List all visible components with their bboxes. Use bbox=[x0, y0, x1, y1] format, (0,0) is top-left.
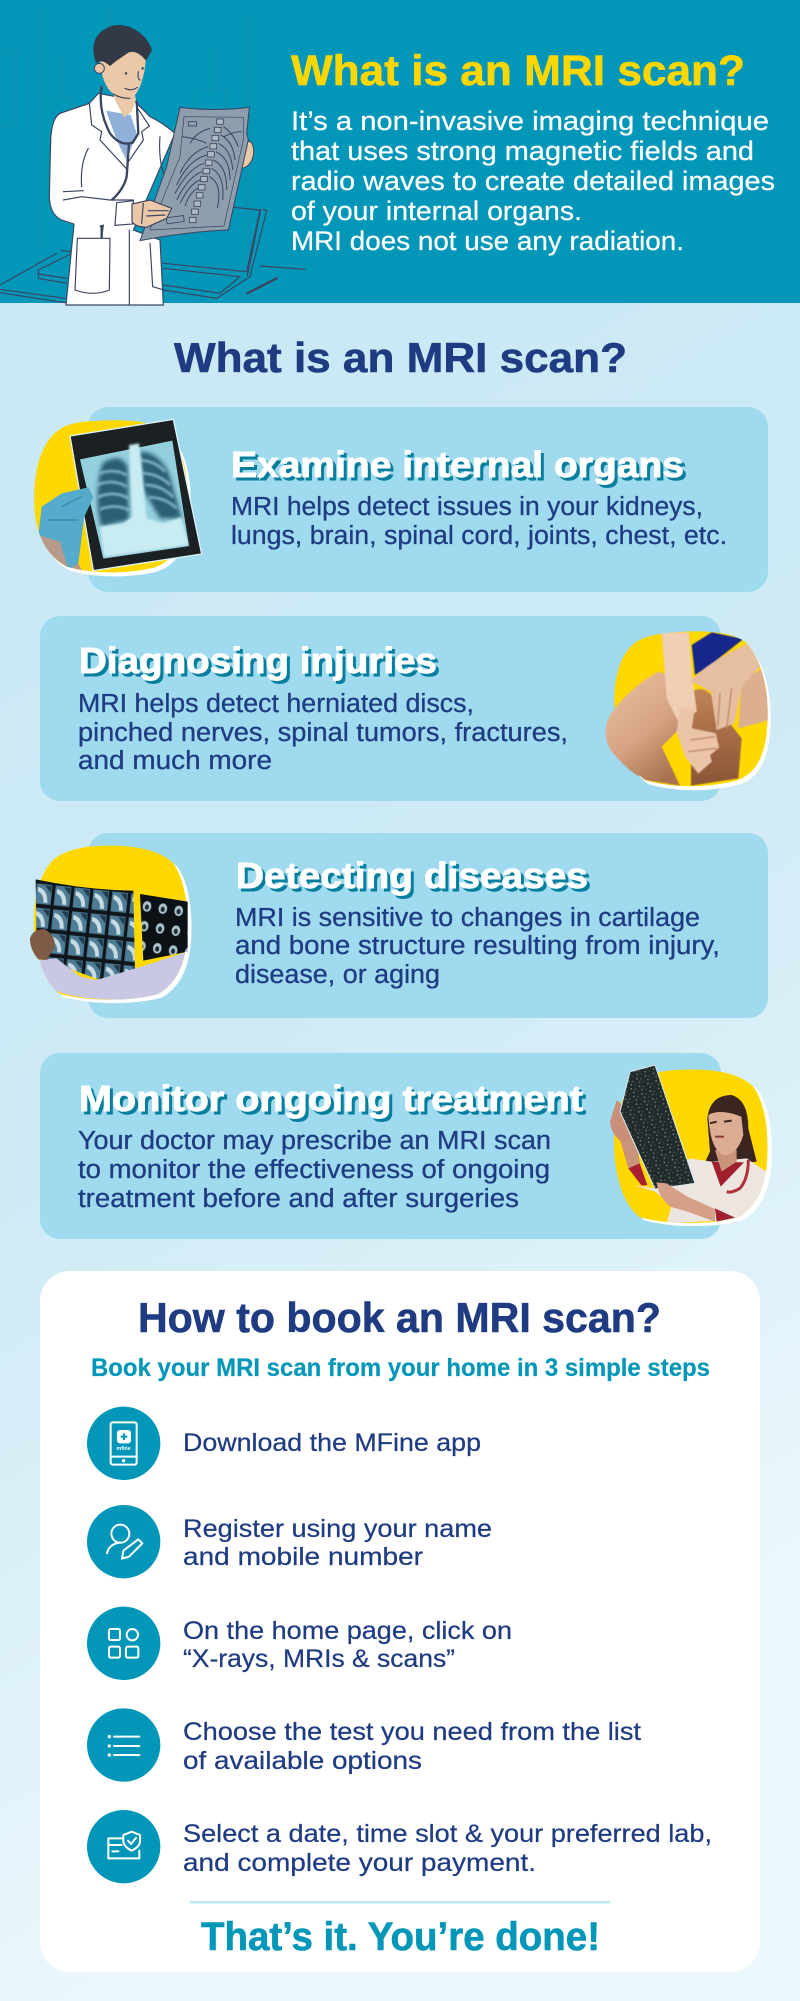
step text: “X-rays, MRIs & scans” bbox=[183, 1645, 455, 1673]
step 2 bbox=[87, 1505, 492, 1578]
photo: hands holding knee bbox=[605, 631, 771, 790]
neck and face bbox=[715, 1150, 737, 1172]
step text: Download the MFine app bbox=[183, 1429, 481, 1457]
closing message: That’s it. You’re done! bbox=[201, 1915, 600, 1959]
desk, tablet and laptop bbox=[0, 207, 305, 303]
step text: and mobile number bbox=[183, 1543, 423, 1571]
panel: top banner bbox=[0, 0, 800, 305]
coat cuff bbox=[115, 201, 133, 225]
doctor's coat bbox=[49, 93, 175, 305]
card title: Monitor ongoing treatment bbox=[79, 1078, 583, 1119]
step text: Choose the test you need from the list bbox=[183, 1718, 641, 1746]
step 1 bbox=[87, 1407, 481, 1480]
step text bbox=[183, 1820, 712, 1877]
icon: user with pencil bbox=[87, 1505, 160, 1578]
section heading: What is an MRI scan? bbox=[174, 334, 627, 381]
photo: female doctor holding scan bbox=[610, 1065, 772, 1226]
hair bbox=[93, 25, 152, 66]
icon: phone with app: mfine bbox=[117, 1446, 131, 1452]
x-ray film bbox=[140, 107, 249, 241]
card text: disease, or aging bbox=[235, 961, 440, 989]
card text: MRI helps detect herniated discs, bbox=[78, 690, 474, 718]
panel: how to book bbox=[40, 1271, 760, 1972]
card text: treatment before and after surgeries bbox=[78, 1185, 519, 1213]
card text bbox=[78, 690, 568, 775]
banner description: of your internal organs. bbox=[291, 196, 582, 226]
booking heading: How to book an MRI scan? bbox=[138, 1294, 661, 1341]
banner description bbox=[291, 106, 775, 256]
card text: and much more bbox=[78, 747, 272, 775]
panel: examine internal organs bbox=[34, 407, 768, 592]
booking subheading: Book your MRI scan from your home in 3 simple steps bbox=[91, 1354, 710, 1382]
step text: On the home page, click on bbox=[183, 1617, 512, 1645]
icon: payment card with shield bbox=[87, 1810, 160, 1883]
card title: Detecting diseases bbox=[236, 855, 588, 896]
step text: of available options bbox=[183, 1747, 422, 1775]
right hand bbox=[237, 141, 254, 168]
coat details bbox=[63, 103, 163, 305]
icon: phone with app bbox=[87, 1407, 160, 1480]
step text: Select a date, time slot & your preferred lab, bbox=[183, 1820, 712, 1848]
step text: Register using your name bbox=[183, 1515, 492, 1543]
stethoscope bbox=[101, 86, 138, 238]
banner description: radio waves to create detailed images bbox=[291, 166, 775, 196]
photo: doctor viewing MRI films bbox=[30, 846, 191, 1003]
card text: pinched nerves, spinal tumors, fractures, bbox=[78, 719, 568, 747]
banner description: It’s a non-invasive imaging technique bbox=[291, 106, 769, 136]
scrubs bbox=[106, 111, 137, 161]
icon: app grid bbox=[87, 1607, 160, 1680]
card text: MRI is sensitive to changes in cartilage bbox=[235, 904, 700, 932]
banner description: that uses strong magnetic fields and bbox=[291, 136, 754, 166]
card text bbox=[231, 493, 727, 550]
step 5 bbox=[87, 1810, 712, 1883]
card text: and bone structure resulting from injury, bbox=[235, 932, 720, 960]
banner heading: What is an MRI scan? bbox=[291, 47, 745, 95]
step 3 bbox=[87, 1607, 512, 1680]
card text: Your doctor may prescribe an MRI scan bbox=[78, 1127, 551, 1155]
card title: Examine internal organs bbox=[231, 444, 684, 485]
card text: lungs, brain, spinal cord, joints, chest, etc. bbox=[231, 522, 727, 550]
step text bbox=[183, 1718, 641, 1775]
card text bbox=[235, 904, 720, 989]
card text bbox=[78, 1127, 551, 1213]
left hand bbox=[132, 200, 172, 227]
panel: diagnosing injuries bbox=[40, 616, 771, 801]
step 4 bbox=[87, 1708, 641, 1782]
panel: detecting diseases bbox=[30, 833, 768, 1018]
head bbox=[100, 43, 146, 117]
card title: Diagnosing injuries bbox=[79, 640, 437, 681]
panel: monitor ongoing treatment bbox=[40, 1053, 772, 1239]
illustration: doctor holding x-ray bbox=[0, 8, 305, 305]
step text bbox=[183, 1617, 512, 1673]
card text: MRI helps detect issues in your kidneys, bbox=[231, 493, 703, 521]
icon: list bbox=[87, 1708, 160, 1782]
step text bbox=[183, 1515, 492, 1571]
card text: to monitor the effectiveness of ongoing bbox=[78, 1156, 550, 1184]
banner description: MRI does not use any radiation. bbox=[291, 226, 684, 256]
photo: hand holding chest x-ray bbox=[34, 419, 202, 576]
step text: and complete your payment. bbox=[183, 1849, 536, 1877]
